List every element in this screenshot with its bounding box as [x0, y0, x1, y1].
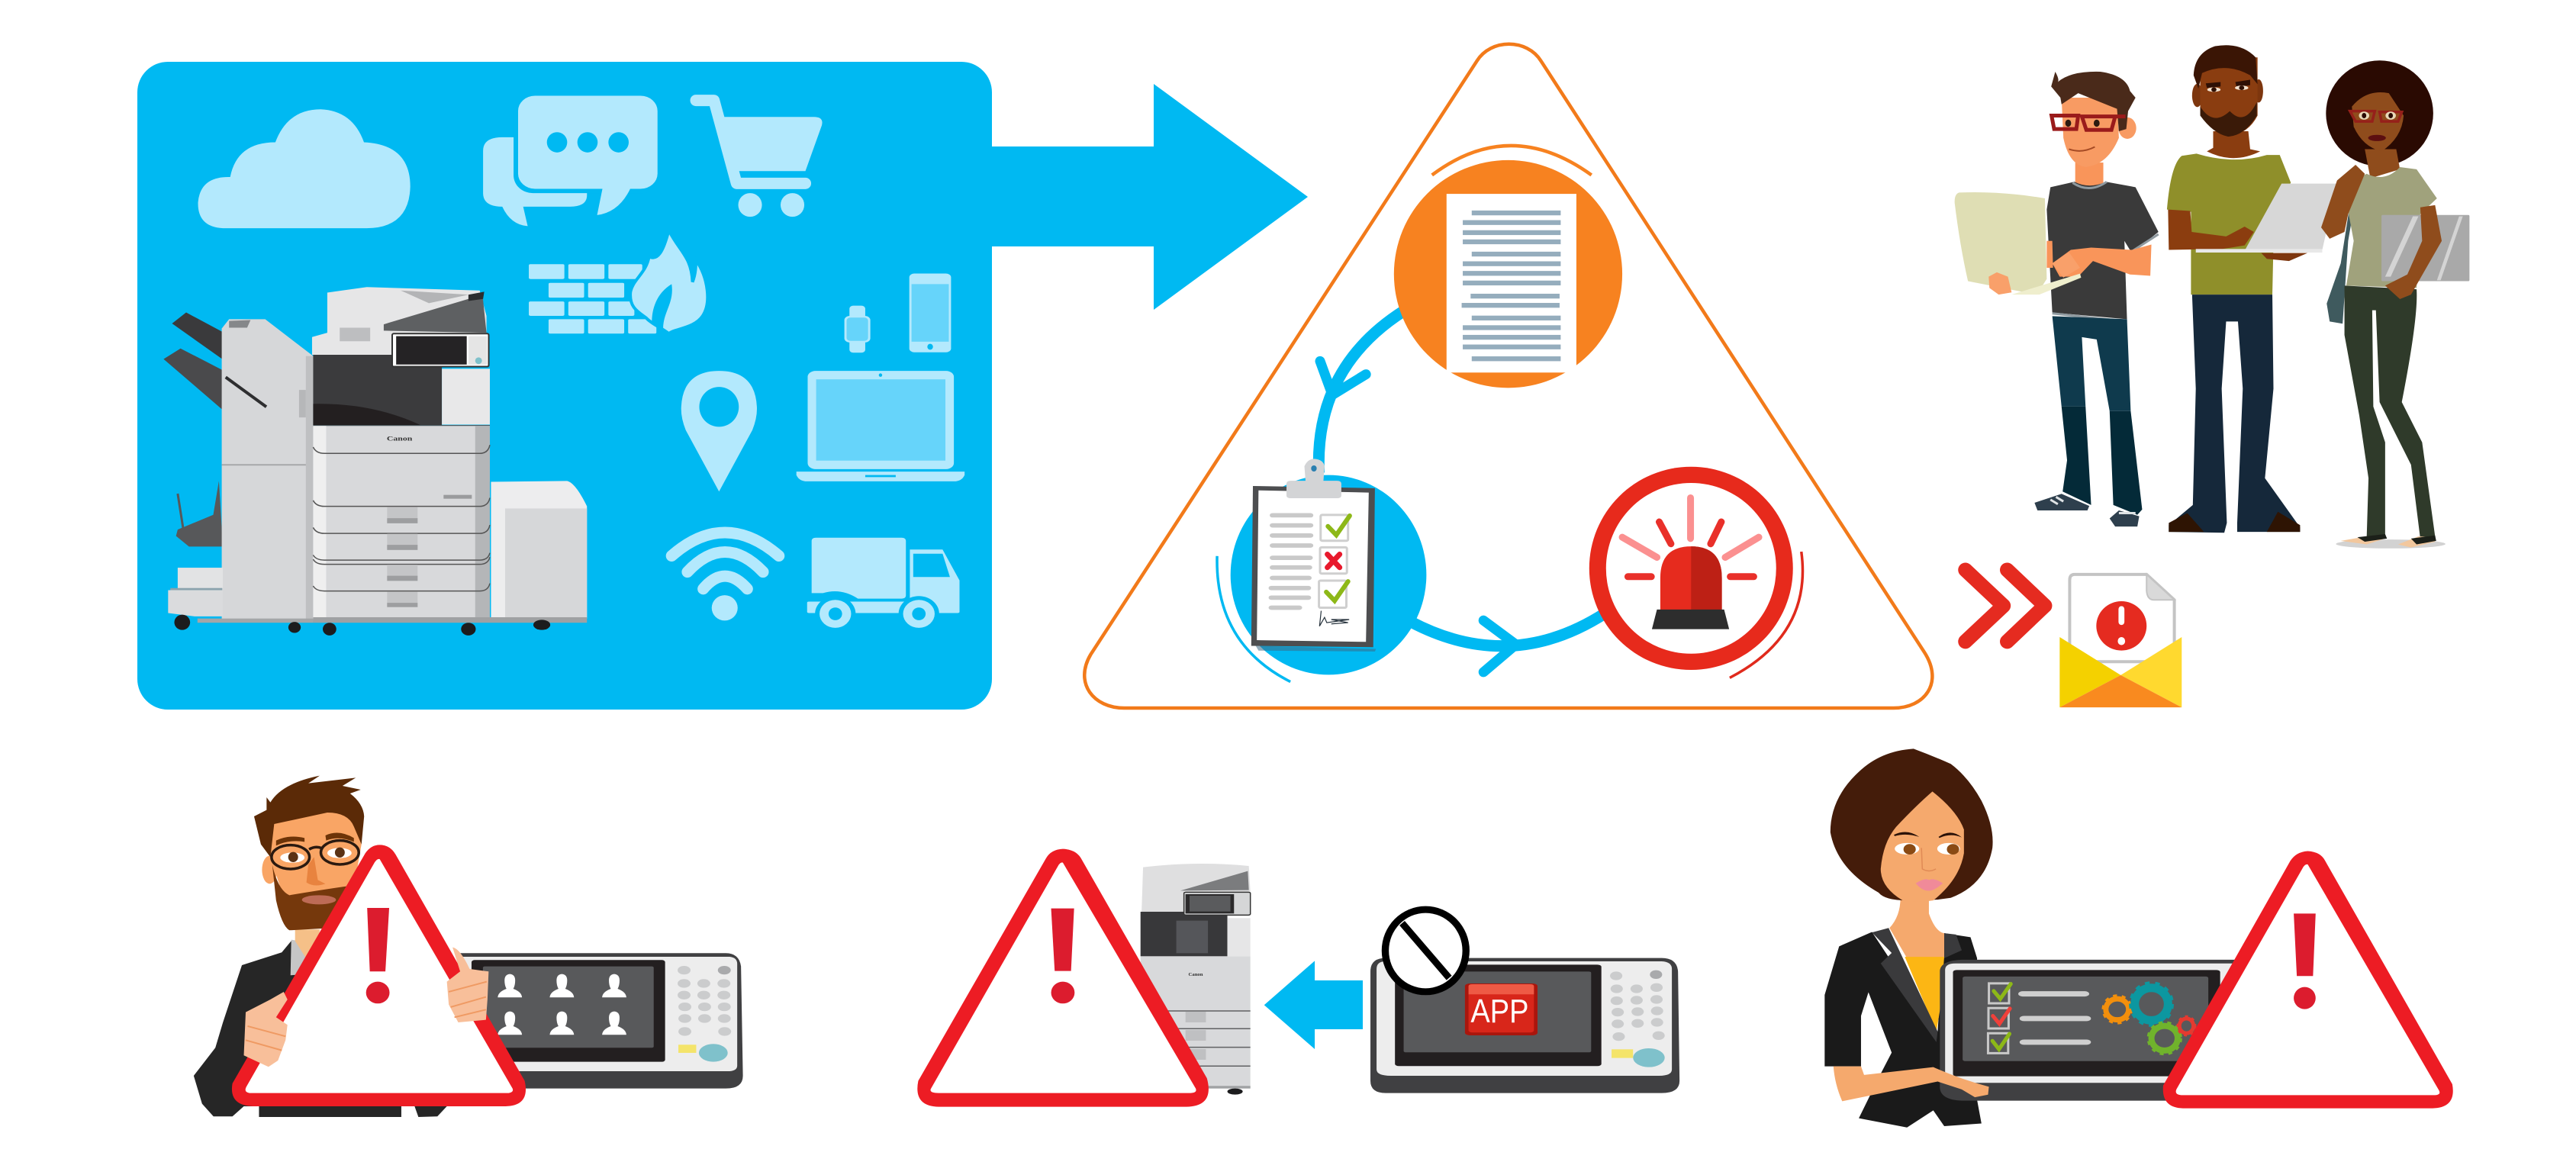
- control panel with user icons: [456, 953, 743, 1089]
- control panel with settings screen: [1940, 960, 2236, 1101]
- wheels: [174, 615, 550, 636]
- scene: unauthorized app warning: [917, 849, 1679, 1107]
- hands gripping sign: [244, 948, 488, 1067]
- user silhouettes: [497, 974, 626, 1035]
- icon: checklist on blue circle: [1217, 459, 1426, 682]
- person: man in green shirt with laptop: [2167, 45, 2337, 533]
- checklist rows: [1988, 983, 2091, 1053]
- brand label: Canon: [1189, 972, 1203, 977]
- scanner: [312, 287, 487, 355]
- icon: wifi: [671, 533, 779, 620]
- person: woman with bob hair: [1824, 748, 1993, 1128]
- icon: laptop: [797, 371, 964, 481]
- icon: delivery truck: [807, 538, 960, 632]
- warning triangle sign: [2163, 851, 2453, 1109]
- icon: smartwatch: [845, 306, 871, 352]
- icon: cloud: [198, 109, 411, 228]
- dark output section: [313, 349, 490, 426]
- icon: chat bubbles: [483, 92, 662, 226]
- warning triangle sign: [232, 845, 526, 1106]
- app tile: APP: [1470, 992, 1528, 1030]
- icon: alert envelope: [2059, 575, 2182, 707]
- icon: location pin: [681, 371, 757, 491]
- panel: monitoring cycle triangle: [1084, 44, 1932, 708]
- scene: settings warning: [1824, 748, 2453, 1128]
- panel: connected device environment: [137, 62, 992, 710]
- icon: firewall: [529, 230, 707, 333]
- icon: shopping cart: [696, 101, 823, 217]
- warning triangle sign: [917, 849, 1209, 1107]
- paper deck: [198, 481, 587, 623]
- brand label: Canon: [387, 436, 413, 443]
- gears: [2104, 983, 2195, 1054]
- icons and printer: [163, 92, 964, 636]
- keypad buttons: [1610, 970, 1665, 1041]
- cycle arrow: document to checklist: [1319, 311, 1404, 473]
- icon: smartphone: [910, 273, 951, 352]
- arrow: panel to monitoring cycle: [991, 84, 1308, 310]
- multifunction printer: [1141, 864, 1251, 1095]
- app tile: [1465, 983, 1538, 1035]
- arrow: app to device: [1264, 961, 1363, 1049]
- keypad buttons: [678, 966, 731, 1036]
- finisher body: [168, 319, 313, 620]
- control panel with app tile: [1370, 958, 1679, 1093]
- triangle outline: [1084, 44, 1932, 708]
- multifunction printer: [163, 287, 587, 636]
- main cabinet: [313, 426, 490, 619]
- arrow: red double chevron: [1966, 570, 2045, 642]
- cycle arrow: checklist to alarm: [1411, 613, 1605, 672]
- person: man with glasses and laptop: [1955, 72, 2159, 526]
- icon: document on orange circle: [1394, 146, 1622, 388]
- arm resting on panel: [1834, 1067, 1989, 1101]
- icon: prohibition sign: [1382, 906, 1470, 995]
- finisher trays: [163, 313, 226, 546]
- control panel: [392, 333, 489, 367]
- icon: alarm siren in red ring: [1589, 467, 1803, 678]
- person: woman with bag and tablet: [2321, 60, 2469, 549]
- group: three users with laptops: [1955, 45, 2469, 707]
- panel background: [137, 62, 992, 710]
- scene: user authentication warning: [194, 776, 743, 1117]
- person: bearded man holding sign: [194, 776, 447, 1117]
